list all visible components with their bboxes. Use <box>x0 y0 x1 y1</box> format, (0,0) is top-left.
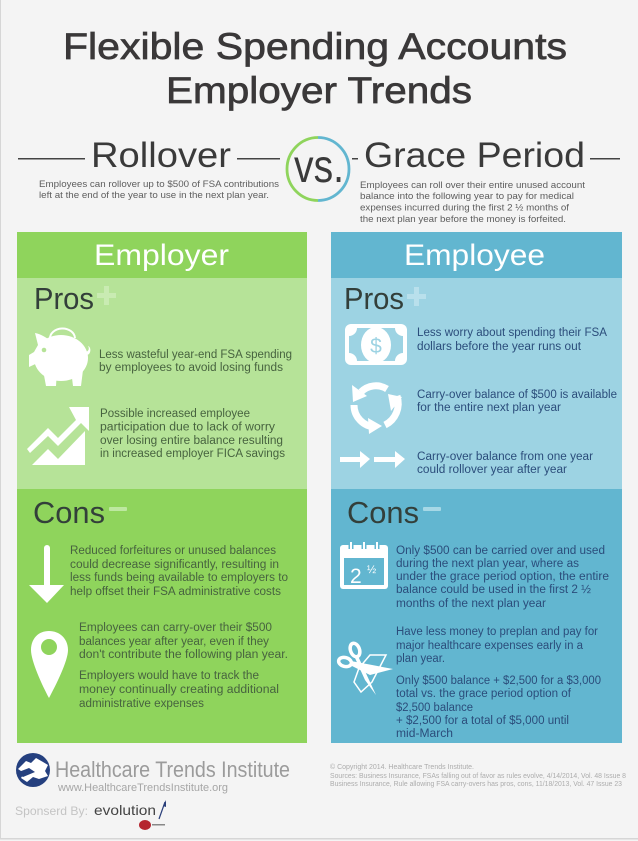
text: cons item 3: administrative expenses <box>79 698 204 710</box>
employee header band: Employee <box>404 239 545 272</box>
heading: Rollover: Rollover <box>91 136 231 175</box>
text: cons item 1: months of the next plan year <box>396 598 546 610</box>
text: pros item 1: dollars before the year runs out <box>417 341 582 353</box>
icon: cycle arrows <box>352 385 402 434</box>
pros heading: Pros <box>344 281 404 316</box>
icon: institute logo <box>16 753 50 787</box>
text: pros item 2: Carry-over balance of $500 is available <box>417 389 617 401</box>
text: pros item 3: could rollover year after year <box>417 464 567 476</box>
icon: dollar bill <box>345 324 407 365</box>
title: Employer Trends <box>166 70 472 111</box>
panel: employer <box>17 232 307 743</box>
text: pros item 2: participation due to lack of worry <box>100 422 275 434</box>
grace period description: balance into the following year to pay for medical <box>360 191 574 202</box>
text: cons item 2: major healthcare expenses early in a <box>396 640 584 652</box>
icon: down arrow <box>29 545 64 603</box>
rollover description: Employees can rollover up to $500 of FSA contributions <box>39 179 279 190</box>
website url: www.HealthcareTrendsInstitute.org <box>57 782 228 794</box>
text: cons item 2: Have less money to preplan and pay for <box>396 626 598 638</box>
text: cons item 1: during the next plan year, where as <box>396 558 579 570</box>
sponsor logo <box>94 800 166 830</box>
title: Flexible Spending Accounts <box>63 26 567 67</box>
footer: copyright and sources: Business Insurance, Rule allowing FSA carry-overs has pros, cons, 11/18/2013, Vol. 47 Issue 23 <box>330 781 622 788</box>
text: pros item 3 <box>417 451 593 476</box>
icon: dollar bill: $ <box>370 335 382 358</box>
comparison header: rollover vs grace period <box>18 136 620 225</box>
text: pros item 2: Possible increased employee <box>100 408 250 420</box>
text: cons item 1: balance could be used in the first 2 ½ <box>396 584 591 596</box>
text: pros item 1: Less wasteful year-end FSA spending <box>99 349 292 361</box>
title <box>63 26 567 111</box>
text: cons item 1: less funds being available to employers to <box>70 572 288 584</box>
text: pros item 2: in increased employer FICA savings <box>100 448 285 460</box>
icon: scissors cutting bill <box>338 642 393 695</box>
icon: double arrows <box>340 451 405 468</box>
icon: calendar <box>340 540 388 589</box>
logo wordmark: Healthcare Trends Institute <box>55 757 290 782</box>
text: pros item 2 <box>417 389 617 414</box>
grace period description: the next plan year before the money is forfeited. <box>360 214 566 225</box>
icon: piggy bank <box>29 328 90 386</box>
text: cons item 2: balances year after year, even if they <box>79 636 269 648</box>
employer pros section <box>17 278 307 489</box>
rollover description <box>39 179 279 201</box>
text: cons item 3: Only $500 balance + $2,500 for a $3,000 <box>396 675 601 687</box>
grace period description: expenses incurred during the first 2 ½ months of <box>360 202 569 214</box>
text: pros item 3: Carry-over balance from one year <box>417 451 593 463</box>
grace period description <box>360 180 585 225</box>
footer: logo and sponsor <box>15 753 290 830</box>
text: cons item 2: don't contribute the following plan year. <box>79 649 288 661</box>
text: cons item 3: total vs. the grace period option of <box>396 688 572 700</box>
vs badge <box>287 138 349 200</box>
text: cons item 1: Reduced forfeitures or unused balances <box>70 545 276 557</box>
employee cons section <box>331 489 622 743</box>
text: pros item 1 <box>417 327 607 353</box>
cons heading: Cons <box>347 495 419 530</box>
text: cons item 2: plan year. <box>396 653 445 665</box>
sponsor logo: evolution <box>94 802 156 818</box>
employee pros section <box>331 278 622 489</box>
sponsor label: Sponserd By: <box>15 804 88 818</box>
footer: copyright and sources: Sources: Business Insurance, FSAs falling out of favor as rules evolve, 4/14/2014, Vol. 48 Issue 8 <box>330 773 626 780</box>
text: cons item 2 <box>396 626 598 665</box>
text: cons item 2 <box>79 622 288 661</box>
rollover description: left at the end of the year to use in the next plan year. <box>39 190 269 201</box>
icon: calendar: ½ <box>367 564 376 576</box>
heading: Grace Period: Grace Period <box>364 136 585 175</box>
text: pros item 1: by employees to avoid losing funds <box>99 362 283 374</box>
text: cons item 3 <box>79 670 279 710</box>
employee header band <box>331 232 622 278</box>
employer header band: Employer <box>94 239 229 272</box>
text: cons item 2: Employees can carry-over their $500 <box>79 622 272 634</box>
cons heading: Cons <box>33 495 105 530</box>
grace period description: Employees can roll over their entire unused account <box>360 180 585 191</box>
text: cons item 1: could decrease significantly, resulting in <box>70 559 279 571</box>
footer: copyright and sources: © Copyright 2014. Healthcare Trends Institute. <box>330 763 474 771</box>
text: cons item 3: mid-March <box>396 728 453 740</box>
text: pros item 2: for the entire next plan year <box>417 402 561 414</box>
text: pros item 2 <box>100 408 285 460</box>
icon: map pin <box>31 631 68 698</box>
text: cons item 3 <box>396 675 601 740</box>
employer cons section <box>17 489 307 743</box>
icon: calendar: 2 <box>350 565 362 588</box>
text: pros item 1: Less worry about spending their FSA <box>417 327 607 339</box>
footer: copyright and sources <box>330 763 626 788</box>
text: cons item 1: help offset their FSA administrative costs <box>70 586 281 598</box>
text: pros item 1 <box>99 349 292 374</box>
text: cons item 1: Only $500 can be carried over and used <box>396 545 605 557</box>
pros heading: Pros <box>34 281 94 316</box>
text: cons item 3: $2,500 balance <box>396 702 473 714</box>
employer header band <box>17 232 307 278</box>
panel: employee <box>331 232 622 743</box>
text: cons item 1 <box>70 545 288 598</box>
text: cons item 3: Employers would have to track the <box>79 670 259 682</box>
icon: rising chart arrow <box>27 407 89 465</box>
text: cons item 3: + $2,500 for a total of $5,000 until <box>396 715 569 727</box>
text: pros item 2: over losing entire balance resulting <box>100 435 283 447</box>
text: cons item 1 <box>396 545 609 610</box>
text: cons item 3: money continually creating additional <box>79 684 279 696</box>
vs badge: vs. <box>294 140 344 192</box>
text: cons item 1: under the grace period option, the entire <box>396 571 609 583</box>
